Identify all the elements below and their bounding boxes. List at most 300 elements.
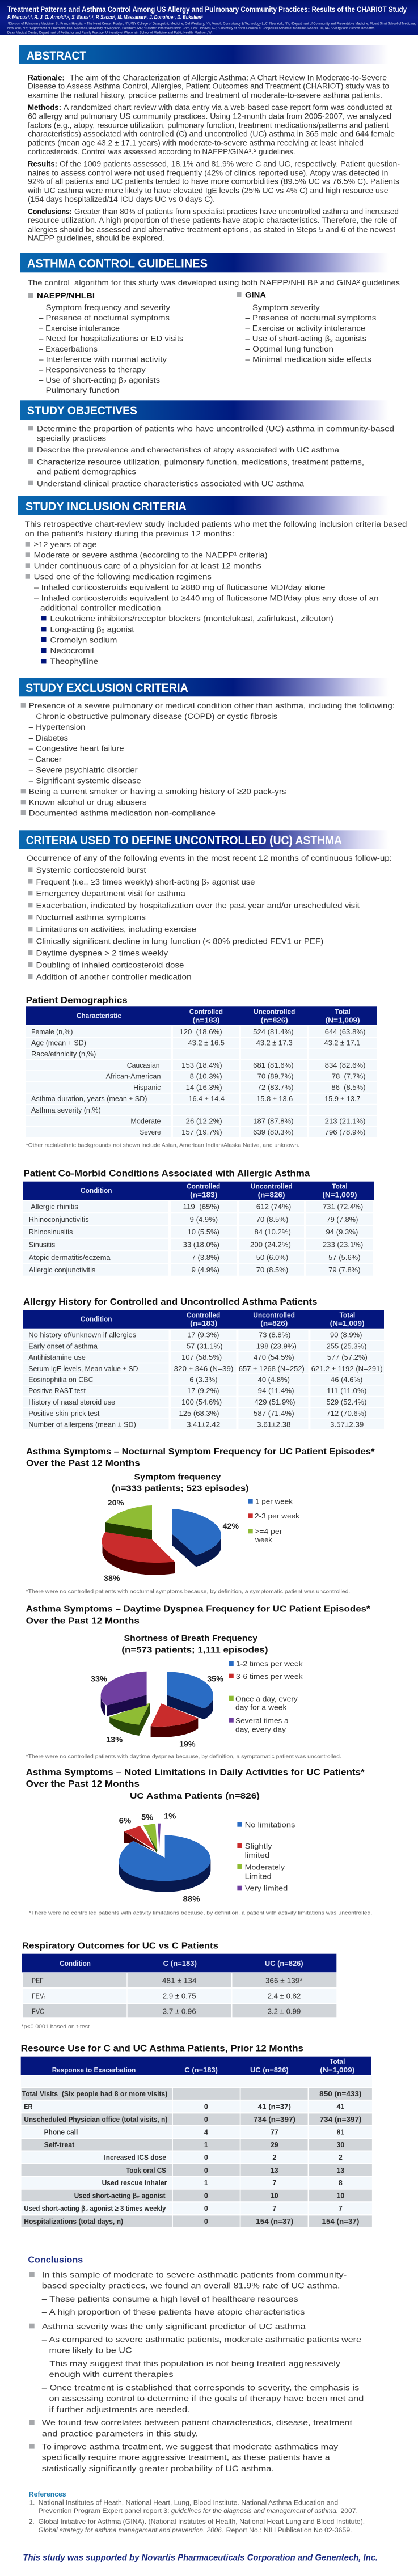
heading: allergy history: Allergy History for Controlled and Uncontrolled Asthma Patients <box>23 1297 318 1307</box>
list: conclusions: on assessing control to determine if the goals of therapy have been met and <box>49 2394 364 2403</box>
list: UC criteria: Daytime dyspnea > 2 times weekly <box>36 949 168 958</box>
heading: nocturnal symptom frequency: Over the Past 12 Months <box>26 1458 140 1468</box>
table rows: 1 <box>204 2179 208 2187</box>
list: inclusion criteria <box>26 540 379 612</box>
table rows: 111 (11.0%) <box>327 1387 366 1395</box>
table rows: 681 (81.6%) <box>253 1061 294 1069</box>
table rows: 529 (52.4%) <box>327 1398 366 1406</box>
table header: C (n=183) <box>163 1960 197 1968</box>
table rows: 644 (63.8%) <box>325 1028 366 1036</box>
chart title: UC asthma patients: UC Asthma Patients (n=826) <box>130 1792 260 1801</box>
panel: abstract <box>19 45 400 243</box>
list: inclusion criteria: – Inhaled corticosteroids equivalent to ≥440 mg of fluticasone MDI/day plus any dose of an <box>34 594 379 603</box>
table rows: 366 ± 139* <box>265 1977 303 1985</box>
table header: Uncontrolled <box>253 1311 295 1319</box>
text block: conclusions: resource utilization. A high proportion of these patients have atopic characteristics. Therefore, the role of <box>28 216 397 225</box>
list: NAEPP/NHLBI: – Need for hospitalizations or ED visits <box>39 335 184 344</box>
panel: criteria used to define uncontrolled asthma <box>19 830 392 982</box>
list: NAEPP/NHLBI <box>28 291 184 395</box>
panel: study objectives <box>20 400 394 488</box>
table rows: Total Visits (Six people had 8 or more visits) <box>22 2090 167 2098</box>
legend: activity limitations <box>237 1820 295 1893</box>
authors: P. Marcus¹˒², R. J. G. Arnold¹˒⁴, S. Ekins³˒⁵, P. Sacco⁶, M. Massanari⁶, J. Donohue⁷, D. Bukstein⁸ <box>7 15 203 20</box>
list: exclusion criteria: – Significant systemic disease <box>29 777 141 786</box>
table rows: Race/ethnicity (n,%) <box>31 1050 96 1058</box>
table rows: 3.41±2.42 <box>187 1421 220 1429</box>
reference list: guidelines for the diagnosis and management of asthma. <box>171 2508 338 2515</box>
list: NAEPP/NHLBI: – Exacerbations <box>39 345 98 354</box>
table rows: 577 (57.2%) <box>327 1353 368 1361</box>
table rows: 72 (83.7%) <box>257 1084 294 1092</box>
list: inclusion criteria: – Inhaled corticosteroids equivalent to ≥880 mg of fluticasone MDI/day alone <box>34 583 326 593</box>
legend: symptom frequency: week <box>255 1536 272 1544</box>
pie chart: activity limitations: 6% <box>119 1816 132 1825</box>
table header: Condition <box>60 1960 91 1968</box>
list: conclusions: To improve asthma treatment, we suggest that moderate asthmatics may <box>42 2442 339 2451</box>
pie chart: activity limitations: 1% <box>164 1811 176 1820</box>
table rows: FEV₁ <box>32 1992 46 2000</box>
list: GINA: – Exercise or activity intolerance <box>245 324 365 333</box>
table rows: 2 <box>339 2154 343 2162</box>
table header: (N=1,009) <box>322 1191 357 1199</box>
legend: activity limitations: Very limited <box>245 1884 288 1893</box>
text block: methods: Methods: <box>28 103 61 112</box>
table rows: 3.57±2.39 <box>330 1421 364 1429</box>
table rows: 587 (71.4%) <box>254 1410 294 1418</box>
list: inclusion criteria: ≥12 years of age <box>34 540 97 549</box>
table rows: 50 (6.0%) <box>256 1254 288 1262</box>
table rows: 120 (18.6%) <box>179 1028 222 1036</box>
table rows: No history of/unknown if allergies <box>28 1331 136 1339</box>
pie chart: symptom frequency: 38% <box>104 1573 120 1583</box>
heading: abstract <box>19 45 388 64</box>
title banner <box>0 0 418 35</box>
table: co-morbid conditions <box>23 1182 374 1276</box>
text block: methods: patients (mean age 43.2 ± 17.1 years) with moderate-to-severe asthma receiving at least inhaled <box>28 138 364 147</box>
table rows: Moderate <box>130 1117 161 1125</box>
table rows: Asthma duration, years (mean ± SD) <box>31 1095 147 1103</box>
table rows: 1 <box>204 2141 208 2149</box>
panel: study inclusion criteria <box>18 496 407 666</box>
table rows: Allergic rhinitis <box>31 1203 78 1211</box>
table header: Characteristic <box>77 1012 121 1020</box>
table rows: Rhinosinusitis <box>29 1228 73 1236</box>
table rows: Eosinophilia on CBC <box>28 1376 94 1384</box>
text block: UC intro: Occurrence of any of the following events in the most recent 12 months of continuous follow-up: <box>27 854 392 863</box>
pie chart: shortness of breath: 35% <box>207 1674 224 1684</box>
chart title: symptom frequency: Symptom frequency <box>134 1473 221 1482</box>
list: UC criteria: Clinically significant decline in lung function (< 80% predicted FEV1 or PEF) <box>36 937 323 946</box>
heading: exclusion <box>19 678 389 696</box>
chart title: symptom frequency: (n=333 patients; 523 episodes) <box>112 1484 249 1493</box>
list: UC criteria: Systemic corticosteroid burst <box>36 866 146 875</box>
list: exclusion criteria <box>21 701 395 818</box>
table header <box>22 1954 336 1972</box>
list: UC criteria: Frequent (i.e., ≥3 times weekly) short-acting β₂ agonist use <box>36 878 255 887</box>
table rows: 107 (58.5%) <box>181 1353 222 1361</box>
table rows: 213 (21.1%) <box>325 1117 366 1125</box>
text block: results: Results: <box>28 159 57 168</box>
table rows: African-American <box>106 1073 161 1081</box>
table rows: 4 <box>204 2129 208 2137</box>
table rows: 3.7 ± 0.96 <box>163 2007 196 2015</box>
table rows: Sinusitis <box>29 1241 55 1249</box>
table rows: 734 (n=397) <box>254 2116 295 2124</box>
text block: methods: A randomized chart review with data entry via a web-based case report form was conducted at <box>64 103 392 112</box>
footnote: daytime: *There were no controlled patients with daytime dyspnea because, by definition, a symptomatic patient was uncontrolled. <box>26 1753 341 1759</box>
table rows: 40 (4.8%) <box>258 1376 290 1384</box>
table header <box>23 1310 384 1329</box>
table rows: Unscheduled Physician office (total visits, n) <box>24 2116 167 2124</box>
table header: Uncontrolled <box>254 1008 295 1016</box>
heading: limitations in daily activities: Over the Past 12 Months <box>26 1779 140 1789</box>
heading: inclusion <box>18 496 389 515</box>
list: objectives: Determine the proportion of patients who have uncontrolled (UC) asthma in community-based <box>37 424 394 433</box>
table rows: 90 (8.9%) <box>330 1331 362 1339</box>
legend: symptom frequency <box>248 1497 300 1544</box>
text block: methods <box>28 103 395 156</box>
text block: results: Of the 1009 patients assessed, 18.1% and 81.9% were C and UC, respectively. Patient question- <box>60 159 400 168</box>
list: conclusions: and practice parameters in this study. <box>42 2429 198 2438</box>
list: GINA: – Presence of nocturnal symptoms <box>245 314 376 323</box>
table header: (n=826) <box>261 1016 288 1024</box>
heading: objectives <box>20 400 389 420</box>
text block: inclusion intro: This retrospective chart-review study included patients who met the following inclusion criteria based <box>25 520 407 529</box>
table rows: 81 <box>336 2129 344 2137</box>
table header: (N=1,009) <box>326 1016 360 1024</box>
list: controller medications: Cromolyn sodium <box>50 636 117 645</box>
table rows: 14 (16.3%) <box>186 1084 222 1092</box>
chart title: shortness of breath: (n=573 patients; 1,111 episodes) <box>121 1646 268 1655</box>
list: exclusion criteria: – Chronic obstructive pulmonary disease (COPD) or cystic fibrosis <box>29 712 277 721</box>
table header: (n=183) <box>190 1319 217 1327</box>
heading: objectives: STUDY OBJECTIVES <box>27 404 137 417</box>
table rows: Positive RAST test <box>28 1387 86 1395</box>
table rows: 8 (10.3%) <box>190 1073 222 1081</box>
table rows: 13 <box>271 2167 278 2175</box>
footnote: limitations: *There were no controlled patients with activity limitations because, by definition, a patient with activity limitations was uncontrolled. <box>29 1910 372 1917</box>
table header: (n=826) <box>260 1319 288 1327</box>
table header: Controlled <box>187 1183 220 1191</box>
text block: conclusions: allergies should be assessed and alternative treatment options, as stated in Steps 5 and 6 of the newest <box>28 225 395 234</box>
table rows: 0 <box>204 2103 208 2110</box>
table header: Uncontrolled <box>251 1183 293 1191</box>
table rows: 26 (12.2%) <box>186 1117 222 1125</box>
heading: respiratory outcomes: Respiratory Outcomes for UC vs C Patients <box>22 1941 218 1951</box>
table rows: 470 (54.5%) <box>254 1353 294 1361</box>
table rows: 9 (4.9%) <box>192 1266 219 1274</box>
table rows: 41 (n=37) <box>258 2103 291 2110</box>
list: NAEPP/NHLBI: – Symptom frequency and severity <box>39 303 171 312</box>
table rows: 30 <box>336 2141 344 2149</box>
table rows: 15.9 ± 13.7 <box>324 1095 361 1103</box>
list: GINA: – Minimal medication side effects <box>245 355 371 364</box>
table rows: 2.4 ± 0.82 <box>268 1992 301 2000</box>
table rows: Female (n,%) <box>31 1028 73 1036</box>
list: GINA: – Use of short-acting β₂ agonists <box>245 335 366 344</box>
legend: shortness of breath: Once a day, every <box>235 1694 298 1703</box>
table header: (n=183) <box>190 1191 217 1199</box>
pie chart: symptom frequency <box>102 1498 239 1583</box>
list: conclusions: Asthma severity was the only significant predictor of UC asthma <box>42 2322 306 2331</box>
table rows: 94 (9.3%) <box>326 1228 358 1236</box>
list: exclusion criteria: Documented asthma medication non-compliance <box>29 809 216 818</box>
table rows: 734 (n=397) <box>320 2116 362 2124</box>
list: conclusions: based specialty practices, we found an overall 81.9% rate of UC asthma. <box>42 2282 340 2291</box>
text block: rationale: examine the natural history, practice patterns and treatment of moderate-to-severe asthma patients. <box>28 91 382 100</box>
reference list: 2007. <box>340 2508 358 2515</box>
list: conclusions: – This may suggest that this population is not being treated aggressively <box>42 2359 341 2368</box>
list: NAEPP/NHLBI: – Use of short-acting β₂ agonists <box>39 376 160 385</box>
heading: abstract: ABSTRACT <box>27 49 86 62</box>
list: conclusions: more likely to be UC <box>49 2346 132 2355</box>
table rows: 43.2 ± 17.3 <box>256 1039 293 1047</box>
table rows: 7 <box>272 2179 276 2187</box>
list: exclusion criteria: – Cancer <box>29 755 62 764</box>
list: UC criteria: Limitations on activities, including exercise <box>36 925 196 934</box>
table rows <box>32 1977 303 2015</box>
table rows: 29 <box>271 2141 278 2149</box>
table rows: 2.9 ± 0.75 <box>163 1992 196 2000</box>
text block: rationale: Disease to Assess Asthma Control, Allergies, Patient Outcomes and Treatment (CHARIOT) study was to <box>28 82 389 91</box>
reference list: Global Initiative for Asthma (GINA). (National Institutes of Health, National Heart Lung and Blood Institute). <box>39 2519 365 2526</box>
table rows: FVC <box>32 2007 44 2015</box>
table rows: Severe <box>140 1128 161 1136</box>
list: controller medications: Theophylline <box>50 657 98 666</box>
list: inclusion criteria: additional controller medication <box>40 603 161 612</box>
table rows: 43.2 ± 16.5 <box>188 1039 225 1047</box>
heading: guidelines: ASTHMA CONTROL GUIDELINES <box>27 257 208 270</box>
table header: Total <box>330 2058 345 2066</box>
list: GINA: – Optimal lung function <box>245 345 333 354</box>
table rows: 79 (7.8%) <box>328 1266 361 1274</box>
table rows: 233 (23.1%) <box>323 1241 363 1249</box>
table rows: 0 <box>204 2218 208 2226</box>
table rows: Serum IgE levels, Mean value ± SD <box>28 1365 138 1373</box>
funding statement: This study was supported by Novartis Pharmaceuticals Corporation and Genentech, Inc. <box>23 2553 378 2562</box>
table: allergy history <box>23 1310 384 1429</box>
list: exclusion criteria: – Severe psychiatric disorder <box>29 766 138 775</box>
table header: Total <box>339 1311 355 1319</box>
table rows: 0 <box>204 2205 208 2213</box>
table rows: 43.2 ± 17.1 <box>324 1039 360 1047</box>
text block: results: (154 days hospitalized/14 ICU days UC vs 0 days C). <box>28 195 215 204</box>
legend: activity limitations: Limited <box>245 1872 272 1880</box>
table rows: 10 <box>271 2192 278 2200</box>
list: objectives: specialty practices <box>37 434 106 443</box>
table header <box>21 2057 371 2075</box>
table header: (N=1,009) <box>330 1319 365 1327</box>
list: GINA <box>237 291 376 364</box>
text block: inclusion intro <box>25 520 407 539</box>
table rows: 17 (9.3%) <box>187 1331 219 1339</box>
table header: UC (n=826) <box>265 1960 303 1968</box>
table header: C (n=183) <box>184 2066 218 2074</box>
list: NAEPP/NHLBI: – Presence of nocturnal symptoms <box>39 314 170 323</box>
text block: conclusions <box>28 207 399 243</box>
heading: resource use: Resource Use for C and UC Asthma Patients, Prior 12 Months <box>21 2044 303 2053</box>
list: conclusions: specifically require more aggressive treatment, as these patients have a <box>42 2454 330 2463</box>
heading: UC criteria <box>19 830 389 849</box>
list: GINA: GINA <box>245 291 266 300</box>
table rows: 3.61±2.38 <box>257 1421 291 1429</box>
pie chart: activity limitations <box>119 1811 210 1903</box>
table rows: 154 (n=37) <box>322 2218 359 2226</box>
table rows: 6 (3.3%) <box>189 1376 218 1384</box>
table: patient demographics <box>26 1006 377 1137</box>
table rows: History of nasal steroid use <box>28 1398 115 1406</box>
table rows <box>22 2090 362 2226</box>
table rows: 73 (8.8%) <box>259 1331 290 1339</box>
table header: Total <box>335 1008 351 1016</box>
list: conclusions: In this sample of moderate to severe asthmatic patients from community- <box>42 2270 347 2279</box>
table rows: 731 (72.4%) <box>323 1203 363 1211</box>
table rows <box>31 1028 366 1136</box>
list: UC criteria: Doubling of inhaled corticosteroid dose <box>36 961 184 970</box>
table rows: 255 (25.3%) <box>327 1343 366 1351</box>
list: exclusion criteria: Presence of a severe pulmonary or medical condition other than asthma, including the following: <box>29 701 395 710</box>
list: exclusion criteria: – Congestive heart failure <box>29 745 124 754</box>
panel: conclusions <box>28 2256 364 2473</box>
table rows: Positive skin-prick test <box>28 1410 100 1418</box>
table rows: 84 (10.2%) <box>254 1228 291 1236</box>
table rows: 187 (87.8%) <box>253 1117 294 1125</box>
table header: (n=826) <box>258 1191 285 1199</box>
text block: methods: factors (e.g., atopy, resource utilization, pulmonary function, treatment medications/patterns and patient <box>28 121 389 130</box>
text block: conclusions: Conclusions: <box>28 207 72 216</box>
footnote: respiratory: *p<0.0001 based on t-test. <box>22 2024 91 2030</box>
list: controller medications: Leukotriene inhibitors/receptor blockers (montelukast, zafirlukast, zileuton) <box>50 614 333 623</box>
table rows <box>28 1331 383 1429</box>
table rows: Rhinoconjunctivitis <box>29 1216 89 1224</box>
heading: co-morbid conditions: Patient Co-Morbid Conditions Associated with Allergic Asthma <box>23 1169 310 1179</box>
table header: Response to Exacerbation <box>52 2066 136 2074</box>
list: NAEPP/NHLBI: – Pulmonary function <box>39 386 120 395</box>
table rows: PEF <box>32 1977 44 1985</box>
pie chart: symptom frequency: 42% <box>223 1521 239 1530</box>
reference list: National Institutes of Heath, National Heart, Lung, Blood Institute. National Asthma Education and <box>39 2500 338 2507</box>
reference list <box>29 2500 365 2534</box>
list: controller medications <box>41 614 333 666</box>
text block: methods: 60 allergy and pulmonary US community practices. Using 12-month data from 2005-2007, we analyzed <box>28 112 391 121</box>
heading: patient demographics: Patient Demographics <box>26 996 128 1005</box>
list: UC criteria: Emergency department visit for asthma <box>36 890 185 899</box>
heading: daytime dyspnea frequency: Asthma Symptoms – Daytime Dyspnea Frequency for UC Patient Episodes* <box>26 1605 370 1614</box>
table rows: Self-treat <box>44 2141 75 2149</box>
table rows: 86 (8.5%) <box>331 1084 366 1092</box>
table header: Condition <box>81 1316 112 1323</box>
table rows: 0 <box>204 2116 208 2124</box>
table rows: 0 <box>204 2154 208 2162</box>
table rows: 198 (23.9%) <box>256 1343 297 1351</box>
list: conclusions: – As compared to severe asthmatic patients, moderate asthmatic patients were <box>42 2335 361 2344</box>
list: UC criteria: Nocturnal asthma symptoms <box>36 913 146 923</box>
heading: conclusions: Conclusions <box>28 2256 83 2265</box>
table rows: 153 (18.4%) <box>181 1061 222 1069</box>
table rows: 7 (3.8%) <box>192 1254 219 1262</box>
text block: methods: corticosteroids. Control was assessed according to NAEPP/GINA¹˒² guidelines. <box>28 147 295 156</box>
text block: results: naires to assess control were not used frequently (42% of clinics reported use). Atopy was detected in <box>28 168 388 177</box>
heading: inclusion: STUDY INCLUSION CRITERIA <box>26 500 187 513</box>
table rows: Asthma severity (n,%) <box>31 1106 101 1114</box>
list: controller medications: Nedocromil <box>50 646 94 655</box>
list: conclusions: – These patients consume a high level of healthcare resources <box>42 2295 298 2304</box>
list: objectives <box>28 424 394 488</box>
table rows: 15.8 ± 13.6 <box>256 1095 293 1103</box>
list: UC criteria <box>28 866 360 982</box>
list: conclusions: – A high proportion of these patients have atopic characteristics <box>42 2308 305 2317</box>
table rows: Increased ICS dose <box>104 2154 166 2162</box>
table rows: 46 (4.6%) <box>331 1376 362 1384</box>
text block: results <box>27 159 400 204</box>
heading: limitations in daily activities <box>26 1768 365 1789</box>
table header: Total <box>332 1183 348 1191</box>
table rows: 57 (31.1%) <box>187 1343 223 1351</box>
text block: rationale: Rationale: <box>28 73 65 82</box>
legend: symptom frequency: 1 per week <box>255 1497 293 1505</box>
heading: UC criteria: CRITERIA USED TO DEFINE UNCONTROLLED (UC) ASTHMA <box>26 834 342 847</box>
text block: rationale <box>28 73 389 100</box>
table rows: 157 (19.7%) <box>181 1128 222 1136</box>
table rows: 70 (8.5%) <box>256 1266 288 1274</box>
heading: daytime dyspnea frequency: Over the Past 12 Months <box>26 1616 140 1626</box>
reference list: Report No.: NIH Publication No 02-3659. <box>226 2527 352 2534</box>
list: conclusions: if further adjustments are needed. <box>49 2405 190 2414</box>
table rows: 712 (70.6%) <box>327 1410 366 1418</box>
list: inclusion criteria: Under continuous care of a physician for at least 12 months <box>34 562 261 571</box>
text block: conclusions: NAEPP guidelines, should be explored. <box>28 234 164 243</box>
footnote: demographics: *Other racial/ethnic backgrounds not shown include Asian, American Indian/Alaska Native, and unknown. <box>26 1142 299 1148</box>
legend: shortness of breath: day for a week <box>235 1703 287 1712</box>
table rows: 100 (54.6%) <box>181 1398 222 1406</box>
list: GINA: – Symptom severity <box>245 303 320 312</box>
table rows <box>29 1203 363 1274</box>
list: exclusion criteria: Known alcohol or drug abusers <box>29 798 147 807</box>
table rows: Early onset of asthma <box>28 1343 98 1351</box>
list: conclusions: – Once treatment is established that corresponds to severity, the emphasis is <box>42 2383 359 2392</box>
list: NAEPP/NHLBI: – Responsiveness to therapy <box>39 366 146 375</box>
table rows: 429 (51.9%) <box>254 1398 295 1406</box>
heading: daytime dyspnea frequency <box>26 1605 370 1626</box>
table rows: Hospitalizations (total days, n) <box>24 2218 123 2226</box>
list: NAEPP/NHLBI: NAEPP/NHLBI <box>37 291 95 301</box>
table header: (N=1,009) <box>320 2066 354 2074</box>
table rows: Used short-acting β₂ agonist <box>74 2192 166 2200</box>
legend: shortness of breath: Several times a <box>235 1716 289 1725</box>
table header: Condition <box>81 1187 112 1195</box>
pie chart: activity limitations: 5% <box>141 1812 154 1821</box>
table rows: Caucasian <box>127 1061 160 1069</box>
text block: inclusion intro: on the patient's history during the previous 12 months: <box>25 530 234 539</box>
reference list: Global strategy for asthma management and prevention. 2006. <box>39 2527 223 2534</box>
table rows: 94 (11.4%) <box>258 1387 294 1395</box>
table rows: 154 (n=37) <box>256 2218 293 2226</box>
table rows: Used rescue inhaler <box>102 2179 167 2187</box>
list: exclusion criteria: Being a current smoker or having a smoking history of ≥20 pack-yrs <box>29 787 286 796</box>
table rows: 834 (82.6%) <box>325 1061 366 1069</box>
legend: activity limitations: Moderately <box>245 1863 285 1872</box>
table rows: 200 (24.2%) <box>250 1241 291 1249</box>
list: UC criteria: Exacerbation, indicated by hospitalization over the past year and/or unscheduled visit <box>36 901 360 910</box>
table rows: 612 (74%) <box>256 1203 291 1211</box>
affiliations: Dean Medical Center, Department of Pediatrics and Family Practice, University of Wisconsin School of Medicine and Public Health, Madison, WI. <box>7 31 213 35</box>
list: UC criteria: Addition of another controller medication <box>36 972 192 982</box>
table header: UC (n=826) <box>250 2066 289 2074</box>
heading: nocturnal symptom frequency: Asthma Symptoms – Nocturnal Symptom Frequency for UC Patient Episodes* <box>26 1447 375 1457</box>
heading: guidelines <box>20 253 389 272</box>
reference list: 1. <box>29 2500 35 2507</box>
table rows: 70 (8.5%) <box>256 1216 288 1224</box>
